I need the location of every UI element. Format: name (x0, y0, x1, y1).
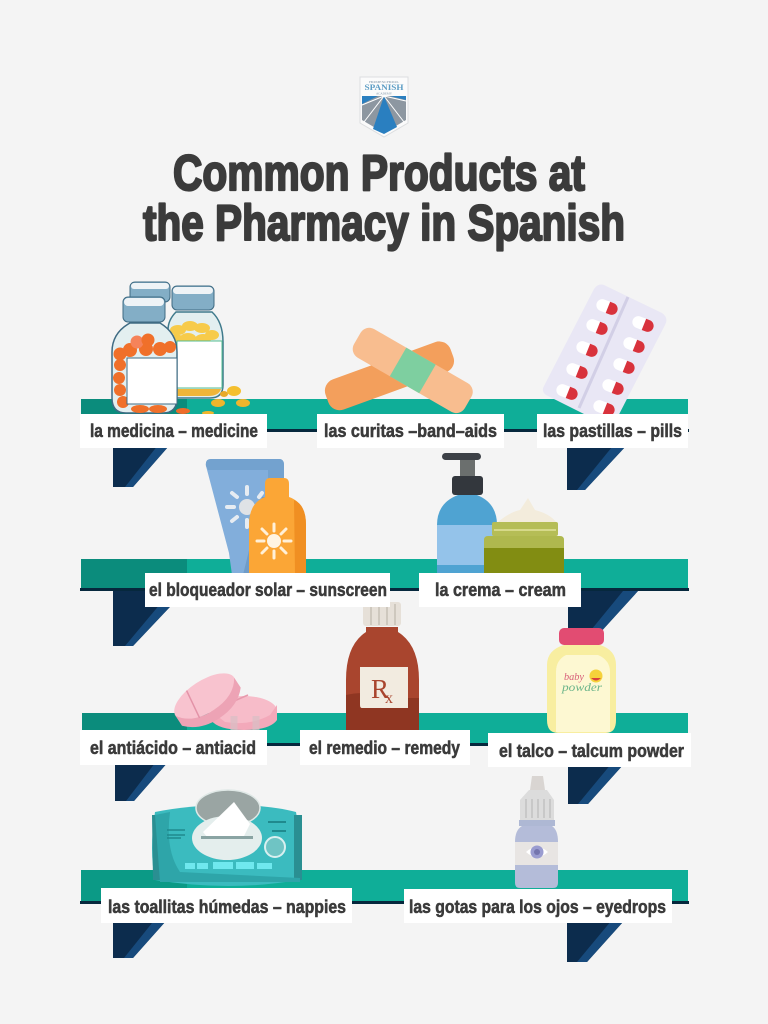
shelf 3 (81, 713, 689, 804)
label: la crema: la crema – cream (435, 580, 566, 600)
label: las toallitas húmedas: las toallitas húmedas – nappies (108, 897, 346, 917)
label: las curitas (317, 414, 504, 448)
label: las pastillas (537, 414, 688, 448)
label: el antiácido: el antiácido – antiacid (90, 738, 256, 758)
label: las gotas para los ojos: las gotas para los ojos – eyedrops (409, 897, 666, 917)
icon: talcum powder: baby (564, 671, 584, 683)
label: las gotas para los ojos (404, 889, 672, 923)
label: la medicina: la medicina – medicine (90, 421, 258, 441)
icon: antacid tablets (167, 664, 277, 738)
label: el remedio (300, 730, 470, 765)
label: la crema (419, 573, 581, 607)
logo: shield (360, 77, 408, 137)
icon: cream pump bottle and jar (437, 453, 564, 573)
icon: sunscreen tube and bottle (206, 459, 306, 575)
label: el bloqueador solar: el bloqueador solar – sunscreen (149, 580, 387, 600)
icon: band-aids (322, 324, 476, 417)
icon: remedy bottle (346, 602, 419, 730)
title: the Pharmacy in Spanish (143, 195, 625, 251)
label: el talco (488, 733, 691, 767)
icon: talcum powder (547, 628, 616, 733)
label: la medicina (80, 414, 267, 448)
icon: remedy bottle: x (385, 690, 393, 707)
icon: blister pack of pills (543, 284, 666, 428)
title (143, 145, 625, 251)
label: las pastillas: las pastillas – pills (543, 421, 682, 441)
icon: remedy bottle: R (371, 674, 389, 704)
shelf 1 (80, 399, 689, 490)
logo: shield: ACADEMY (376, 92, 392, 96)
label: el bloqueador solar (145, 573, 390, 607)
label: las curitas: las curitas –band–aids (324, 421, 497, 441)
icon: talcum powder: powder (561, 680, 602, 694)
shelf 2 (80, 559, 689, 646)
logo: shield: HOMESCHOOL (369, 80, 399, 84)
label: el antiácido (80, 730, 267, 765)
label: el talco: el talco – talcum powder (499, 741, 684, 761)
title: Common Products at (173, 145, 585, 201)
label: el remedio: el remedio – remedy (309, 738, 460, 758)
label: las toallitas húmedas (101, 888, 352, 923)
icon: medicine bottles (112, 282, 250, 415)
logo: shield: SPANISH (364, 83, 404, 92)
icon: eye drops bottle (515, 776, 558, 888)
icon: wet wipes pack (152, 790, 302, 886)
shelf 4 (80, 870, 689, 962)
